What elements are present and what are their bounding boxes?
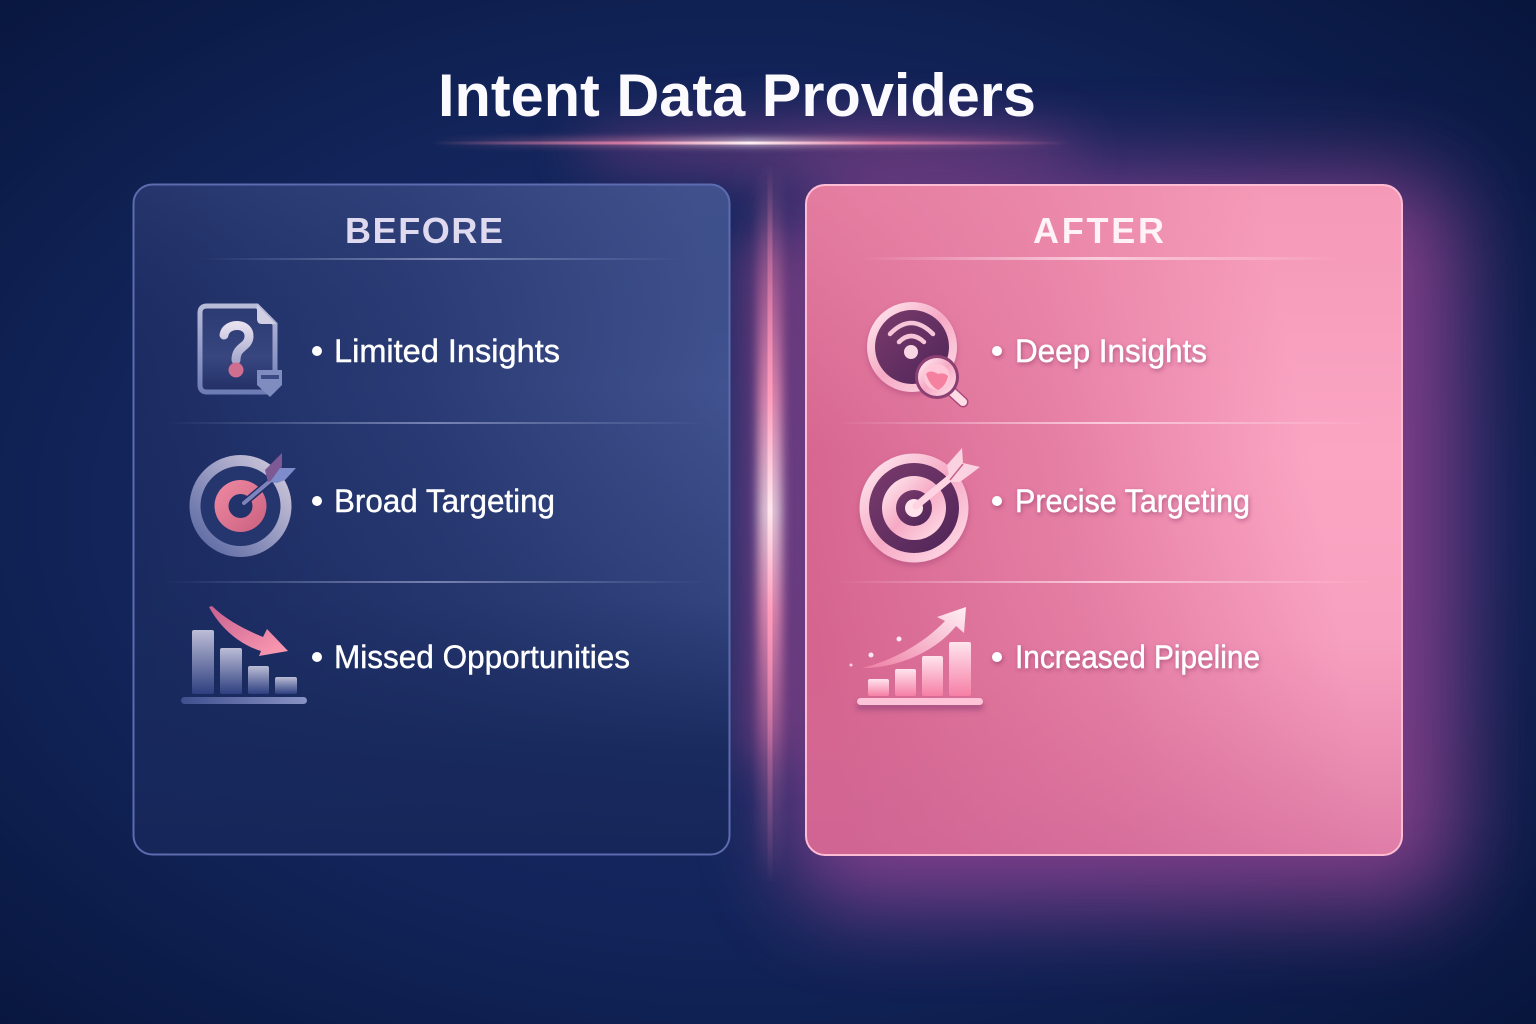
- panel background: before: [134, 184, 730, 854]
- central divider glow: [758, 165, 782, 885]
- label: broad targeting: Broad Targeting: [334, 483, 555, 519]
- panel: after: [806, 185, 1402, 855]
- icon: rising bar chart: [850, 607, 983, 710]
- label: limited insights: Limited Insights: [334, 333, 560, 369]
- icon: signal magnifier: [867, 302, 963, 402]
- icon: precise target with arrow: [859, 448, 980, 566]
- title: Intent Data Providers: [438, 62, 1036, 129]
- title underline glow: [430, 139, 1070, 145]
- panel background: after: [806, 185, 1402, 855]
- icon: target with dart: [190, 453, 296, 557]
- label: missed opportunities: Missed Opportunities: [334, 639, 630, 675]
- label: precise targeting: Precise Targeting: [1015, 483, 1250, 519]
- heading: after: AFTER: [1033, 210, 1164, 251]
- icon: declining bar chart: [181, 606, 307, 704]
- panel: before: [134, 184, 730, 854]
- icon: document with question mark: [200, 305, 282, 397]
- heading: before: BEFORE: [345, 210, 503, 251]
- label: increased pipeline: Increased Pipeline: [1015, 639, 1260, 675]
- label: deep insights: Deep Insights: [1015, 333, 1207, 369]
